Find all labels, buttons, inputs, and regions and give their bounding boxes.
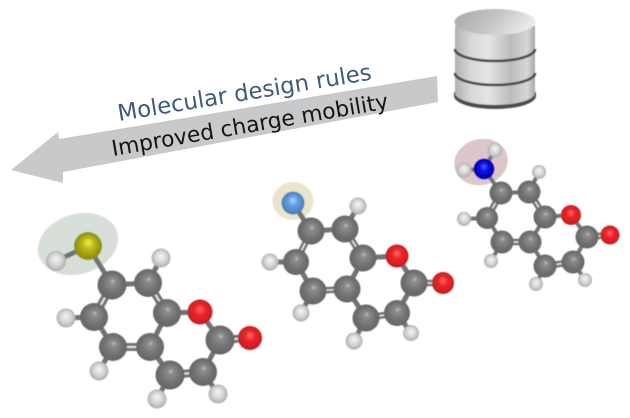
highlight: NH2 group xyxy=(449,133,513,191)
molecule: amino-substituted coumarin xyxy=(449,133,620,291)
highlight: SH group xyxy=(30,203,126,285)
atoms xyxy=(262,192,454,350)
molecule: fluoro-substituted coumarin xyxy=(262,182,454,350)
atoms xyxy=(46,232,262,408)
arrow: design direction xyxy=(11,76,438,183)
molecule: thiol-substituted coumarin xyxy=(30,203,262,408)
atoms xyxy=(456,142,620,291)
bonds xyxy=(464,150,610,284)
bonds xyxy=(56,246,250,399)
highlight: F atom xyxy=(272,182,314,220)
heading: Molecular design rules: Molecular design rules xyxy=(116,60,373,127)
label: Improved charge mobility: Improved charge mobility xyxy=(110,90,390,162)
bonds xyxy=(270,203,443,341)
icon: database cylinder xyxy=(454,9,536,109)
